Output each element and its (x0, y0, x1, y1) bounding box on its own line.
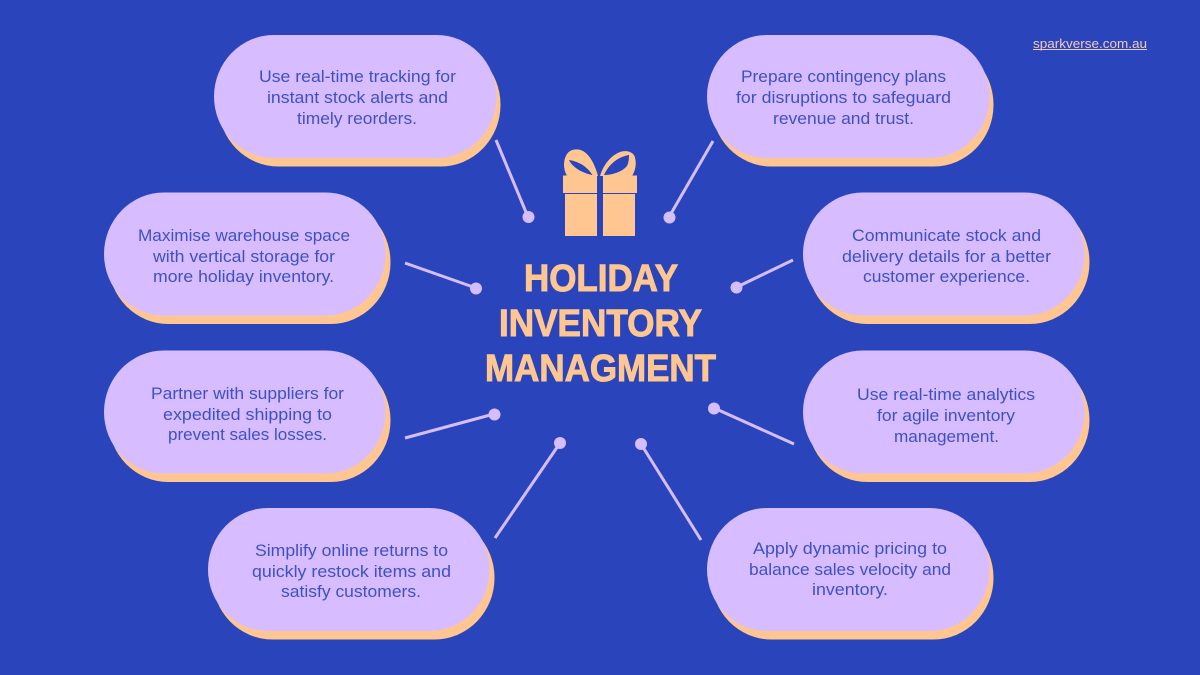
icon: gift box (563, 149, 637, 236)
connector: upper right (730, 260, 793, 294)
panel: real-time tracking: timely reorders. (297, 109, 417, 128)
connector: lower left (405, 408, 500, 438)
connector: bottom right (635, 438, 701, 540)
panel: dynamic pricing: inventory. (812, 580, 888, 599)
panel: real-time tracking: instant stock alerts and (267, 88, 448, 107)
panel: online returns: Simplify online returns to (255, 541, 448, 560)
panel: real-time tracking: Use real-time tracking for (259, 67, 456, 86)
panel: online returns (208, 508, 494, 640)
panel: warehouse space: Maximise warehouse space (138, 226, 350, 245)
title: HOLIDAY (524, 258, 678, 300)
panel: warehouse space (104, 192, 390, 324)
panel: contingency plans: Prepare contingency plans (741, 67, 946, 86)
panel: online returns: satisfy customers. (281, 582, 421, 601)
panel: online returns: quickly restock items and (252, 562, 451, 581)
connector: bottom left (495, 437, 566, 538)
connector: upper left (405, 263, 482, 294)
panel: communicate stock: customer experience. (863, 267, 1030, 286)
panel: contingency plans: revenue and trust. (773, 109, 914, 128)
connector: lower right (708, 402, 794, 444)
panel: dynamic pricing: Apply dynamic pricing to (753, 539, 947, 558)
panel: contingency plans: for disruptions to safeguard (736, 88, 951, 107)
panel: real-time tracking (214, 35, 500, 166)
panel: contingency plans (707, 35, 994, 166)
title: INVENTORY (499, 303, 702, 345)
panel: supplier partners (104, 350, 390, 482)
panel: dynamic pricing (707, 508, 994, 640)
panel: supplier partners: Partner with suppliers for (151, 384, 344, 403)
panel: communicate stock: delivery details for a better (842, 247, 1051, 266)
panel: real-time analytics: management. (894, 427, 999, 446)
panel: supplier partners: expedited shipping to (163, 405, 332, 424)
panel: communicate stock: Communicate stock and (852, 226, 1041, 245)
panel: real-time analytics: Use real-time analytics (857, 385, 1035, 404)
title (485, 258, 716, 390)
panel: real-time analytics (803, 350, 1090, 482)
website link: sparkverse.com.au (1033, 36, 1147, 51)
connector: top right (664, 141, 713, 224)
panel: warehouse space: more holiday inventory. (153, 267, 334, 286)
connector: top left (496, 140, 534, 223)
panel: warehouse space: with vertical storage for (152, 247, 335, 266)
panel: communicate stock (803, 192, 1090, 324)
panel: supplier partners: prevent sales losses. (168, 425, 327, 444)
panel: real-time analytics: for agile inventory (877, 406, 1016, 425)
panel: dynamic pricing: balance sales velocity and (749, 560, 951, 579)
title: MANAGMENT (485, 348, 716, 390)
